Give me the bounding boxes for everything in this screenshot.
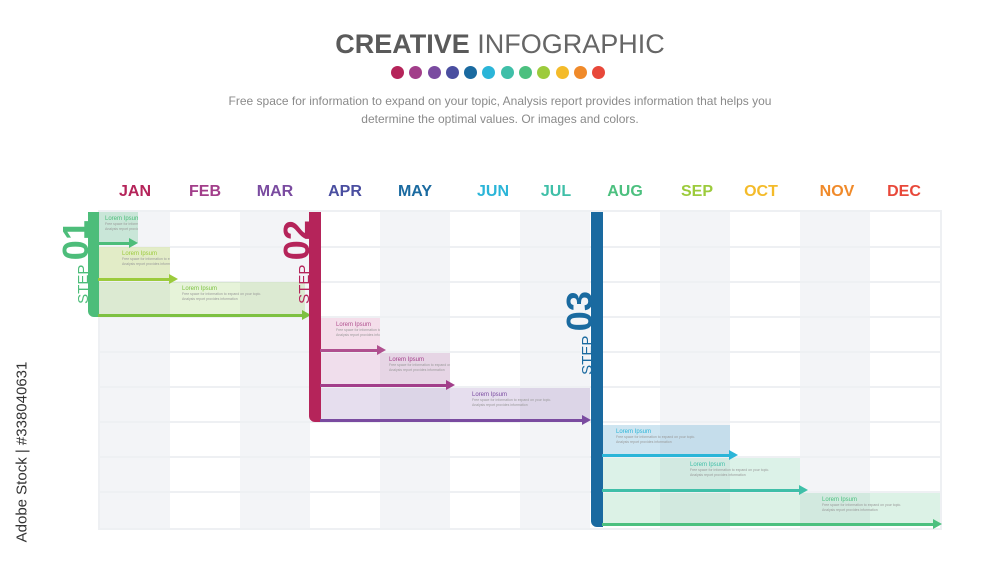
month headers [119,183,921,200]
month headers: JAN [119,183,151,200]
month headers: OCT [744,183,778,200]
box 1.3 [98,282,305,315]
month headers: JUL [541,183,571,200]
month headers: FEB [189,183,221,200]
month headers: MAR [257,183,293,200]
step 3 group: Analysis report provides information [690,473,746,477]
month headers: AUG [607,183,643,200]
step 3 group: Lorem Ipsum [822,497,857,503]
step 3 group: Lorem Ipsum [690,462,725,468]
step 1 bar [88,212,99,317]
step 2 bar [309,212,321,422]
step 3 group [559,212,942,529]
box 1.2: Lorem Ipsum [122,251,157,257]
box 1.3: Analysis report provides information [182,297,238,301]
step 2 group: STEP 02 [276,220,317,304]
step 3 group: Free space for information to expand on your topic. [822,503,901,507]
grid [98,210,942,530]
box 1.1 [98,212,138,243]
step 3 group: Lorem Ipsum [616,429,651,435]
step 2 group: Lorem Ipsum [336,322,371,328]
step 3 group: Analysis report provides information [616,440,672,444]
box 1.3: Free space for information to expand on your topic. [182,292,261,296]
step 3 group: STEP 03 [559,291,600,375]
step 3 group: Free space for information to expand on your topic. [690,468,769,472]
month headers: SEP [681,183,713,200]
month headers: JUN [477,183,509,200]
step 2 group: Analysis report provides information [472,403,528,407]
box 1.3: Lorem Ipsum [182,286,217,292]
step 1 group [55,212,309,320]
step 1 label: STEP 01 [55,220,96,304]
color dots [391,66,605,79]
step 2 group: Free space for information to expand on your topic. [472,398,551,402]
month headers: MAY [398,183,432,200]
step 2 group: Analysis report provides information [389,368,445,372]
side credit: Adobe Stock | #338040631 [14,362,30,542]
step 3 group: Free space for information to expand on your topic. [616,435,695,439]
step 3 group: Analysis report provides information [822,508,878,512]
step 3 bar [591,212,603,527]
month headers: DEC [887,183,921,200]
subtitle: Free space for information to expand on your topic, Analysis report provides information that helps you [229,94,771,108]
month headers: APR [328,183,362,200]
step 2 group: Lorem Ipsum [472,392,507,398]
subtitle [229,94,771,126]
subtitle: determine the optimal values. Or images and colors. [361,112,639,126]
month headers: NOV [820,183,854,200]
title: CREATIVE INFOGRAPHIC [335,29,665,59]
step 2 group [276,212,591,425]
box 1.2 [98,247,170,279]
arrows step 1 [98,242,130,245]
step 2 group: Lorem Ipsum [389,357,424,363]
